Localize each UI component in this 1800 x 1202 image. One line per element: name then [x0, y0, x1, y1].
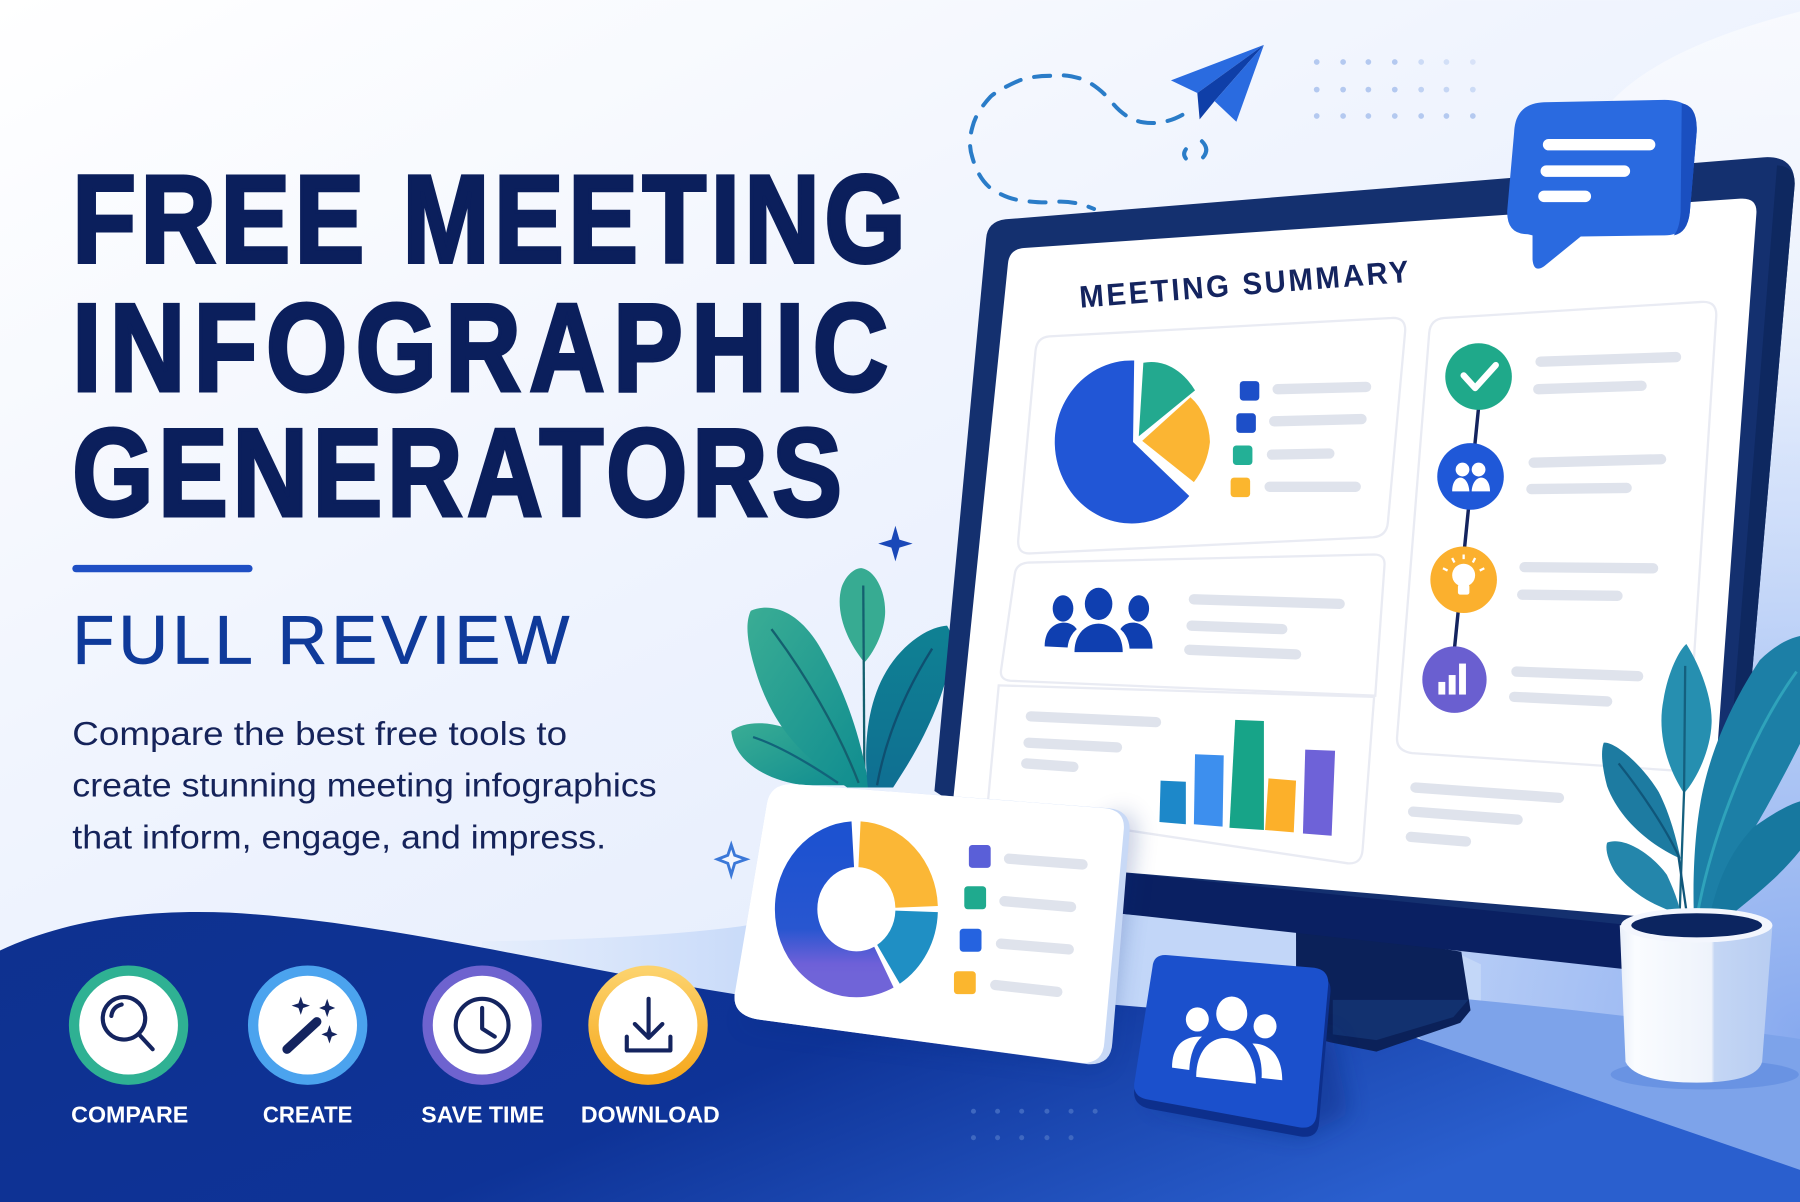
monitor [934, 157, 1795, 971]
plant: left [731, 568, 952, 788]
bezel [934, 157, 1795, 967]
pot [1620, 908, 1772, 1083]
title: GENERATORS [72, 404, 842, 543]
leaf [840, 568, 885, 662]
panel: people [1001, 555, 1385, 696]
pot shadow [1611, 1060, 1799, 1089]
accent divider [72, 565, 253, 572]
leaf [1694, 636, 1800, 928]
speech bubble [1507, 100, 1697, 269]
feature: compare [71, 971, 188, 1128]
feature: save time [421, 971, 544, 1128]
step: team [1437, 443, 1504, 510]
icon: sparkle outline [717, 845, 746, 875]
donut chart [796, 844, 917, 974]
plant: right [1602, 636, 1800, 1089]
pie chart [1055, 360, 1210, 523]
feature: compare: COMPARE [71, 1102, 188, 1128]
screen [953, 199, 1756, 922]
dot grid top [1314, 59, 1476, 119]
feature: download: DOWNLOAD [581, 1102, 720, 1128]
bars [1159, 720, 1335, 836]
dot grid bottom [971, 1109, 1098, 1140]
legend [1231, 381, 1366, 497]
step: check [1445, 343, 1512, 410]
step: chart [1422, 646, 1487, 713]
panel: timeline [1397, 302, 1716, 771]
leaf [1661, 644, 1712, 793]
notes lines [1411, 788, 1559, 841]
feature: create [253, 971, 362, 1128]
leaf [866, 626, 952, 788]
screen heading: MEETING SUMMARY [1078, 254, 1413, 315]
subtitle: FULL REVIEW [72, 602, 569, 679]
paper plane trail [970, 75, 1206, 209]
panel: pie chart [1018, 318, 1405, 553]
leaf [1707, 801, 1800, 928]
description: create stunning meeting infographics [72, 768, 657, 805]
description: that inform, engage, and impress. [72, 819, 606, 856]
navy wave footer [0, 912, 1800, 1202]
desk surface [1355, 987, 1800, 1182]
icon: sparkle filled [878, 526, 913, 561]
icon: paper plane [1171, 45, 1264, 122]
icon: team [1045, 588, 1153, 652]
title [72, 150, 905, 543]
description: Compare the best free tools to [72, 716, 567, 753]
icon: team white [1172, 996, 1282, 1084]
leaf [1606, 841, 1681, 914]
step: idea [1430, 546, 1497, 613]
leaf [731, 723, 851, 785]
panel: bar chart [987, 685, 1374, 863]
title: INFOGRAPHIC [72, 279, 888, 417]
leaf [1602, 743, 1681, 859]
feature: create: CREATE [263, 1102, 352, 1128]
icon row [71, 971, 720, 1128]
monitor stand [1296, 924, 1471, 1052]
legend [954, 845, 1083, 994]
title: FREE MEETING [72, 150, 905, 289]
description [72, 716, 657, 856]
feature: download [581, 971, 720, 1128]
leaf [747, 608, 869, 788]
dashboard card [735, 784, 1136, 1068]
feature: save time: SAVE TIME [421, 1102, 544, 1128]
team tile [1134, 955, 1349, 1137]
